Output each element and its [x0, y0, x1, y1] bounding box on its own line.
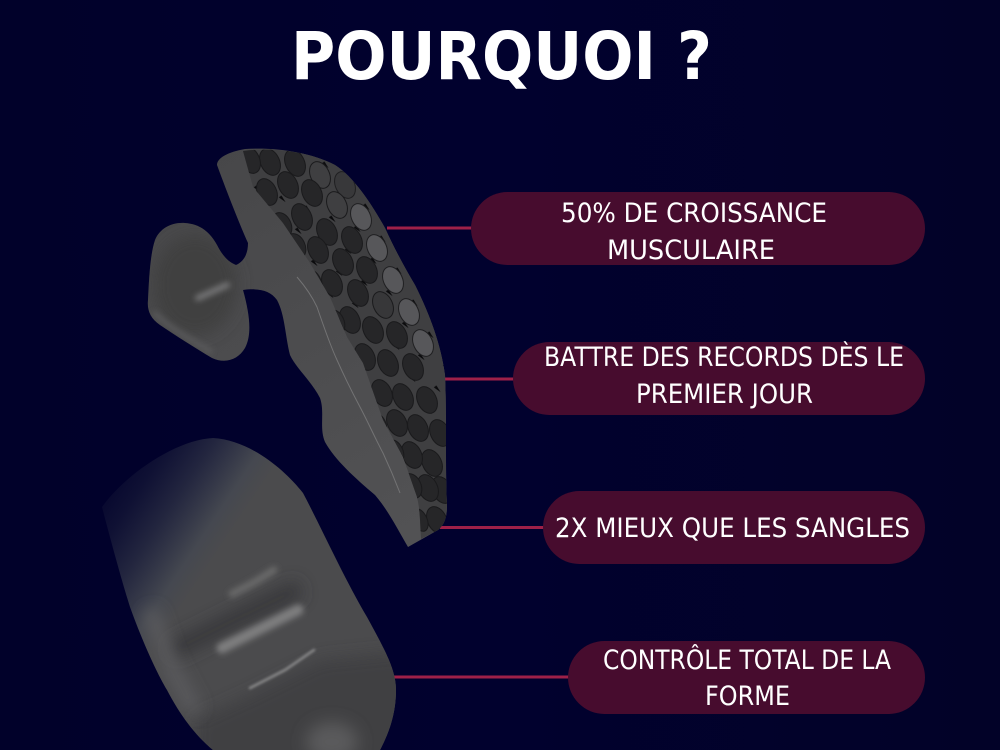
pill: contrôle total de la forme: CONTRÔLE TOTAL DE LA [603, 644, 891, 676]
infographic canvas [102, 30, 925, 750]
lattice cells: dark rows [243, 150, 447, 532]
pill: contrôle total de la forme: FORME [705, 681, 790, 712]
product: upper lattice shield with paddle [148, 140, 460, 550]
honeycomb lattice [243, 150, 447, 539]
shell seam [297, 277, 400, 493]
pill: 50% de croissance musculaire: 50% DE CROISSANCE [561, 198, 827, 229]
pill: contrôle total de la forme [568, 641, 925, 714]
pill: battre des records: PREMIER JOUR [636, 379, 813, 410]
shield shell and paddle [148, 149, 447, 547]
paddle shading [156, 240, 234, 332]
connector lines [387, 226, 570, 678]
lattice cells: light row [330, 168, 438, 360]
pill: 50% de croissance musculaire: MUSCULAIRE [607, 235, 775, 266]
pill: battre des records: BATTRE DES RECORDS DÈS LE [544, 341, 904, 373]
pill: 2x mieux que les sangles: 2X MIEUX QUE LES SANGLES [555, 513, 910, 544]
pill: 50% de croissance musculaire [471, 192, 925, 266]
pill: battre des records [513, 341, 925, 415]
product: lower padded body [102, 438, 420, 750]
pill: 2x mieux que les sangles [543, 491, 925, 564]
title: POURQUOI ? [291, 18, 712, 95]
paddle stem highlight [198, 285, 227, 298]
